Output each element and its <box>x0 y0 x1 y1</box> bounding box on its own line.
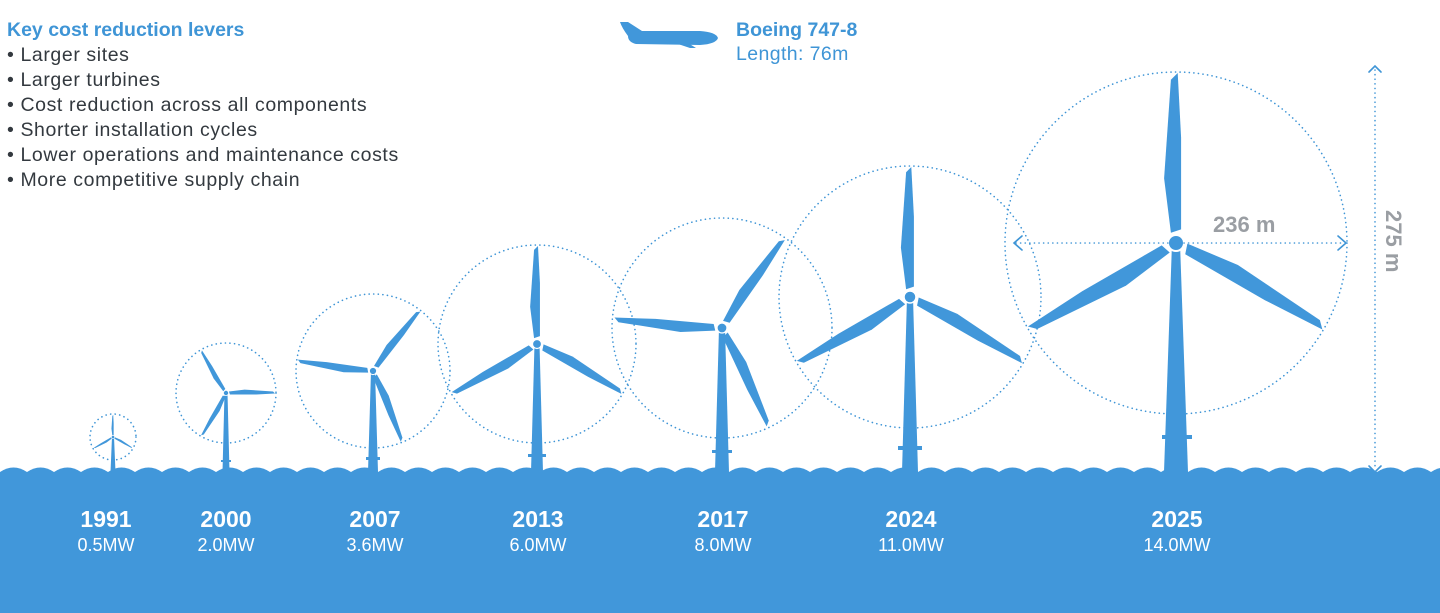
text block: key cost reduction levers: • Larger sites <box>7 44 130 66</box>
year labels: 2024 <box>885 506 937 532</box>
label: 236 m: 236 m <box>1213 212 1275 237</box>
plane caption <box>736 19 858 65</box>
year labels: 11.0MW <box>878 535 944 555</box>
dimension: height 275 m <box>1369 66 1381 472</box>
text block: key cost reduction levers: • Lower operations and maintenance costs <box>7 144 399 166</box>
year labels: 2013 <box>512 506 564 532</box>
rotor circles <box>90 72 1347 460</box>
year labels: 2017 <box>697 506 749 532</box>
text block: key cost reduction levers: • More competitive supply chain <box>7 169 300 191</box>
icon: boeing plane <box>620 22 718 48</box>
year labels: 14.0MW <box>1143 535 1211 555</box>
text block: key cost reduction levers <box>7 19 399 191</box>
turbine 2025 <box>1026 73 1329 472</box>
text block: key cost reduction levers: Key cost reduction levers <box>7 19 244 41</box>
turbine 2024 <box>795 167 1027 472</box>
turbine 2013 <box>451 246 625 472</box>
year labels: 2025 <box>1151 506 1203 532</box>
year labels: 8.0MW <box>694 535 752 555</box>
year labels: 2007 <box>349 506 401 532</box>
year labels: 2000 <box>200 506 252 532</box>
plane caption: Length: 76m <box>736 43 849 65</box>
label: 275 m: 275 m <box>1381 210 1406 272</box>
turbine 2000 <box>164 328 278 472</box>
plane caption: Boeing 747-8 <box>736 19 858 41</box>
text block: key cost reduction levers: • Shorter installation cycles <box>7 119 258 141</box>
year labels: 1991 <box>80 506 132 532</box>
turbine 2017 <box>609 185 864 472</box>
turbine 2007 <box>294 270 474 472</box>
dimension: rotor diameter 236 m <box>1014 236 1346 250</box>
year labels: 0.5MW <box>77 535 135 555</box>
year labels: 2.0MW <box>197 535 255 555</box>
text block: key cost reduction levers: • Larger turbines <box>7 69 161 91</box>
year labels: 3.6MW <box>346 535 404 555</box>
year labels: 6.0MW <box>509 535 567 555</box>
year labels <box>77 506 1211 555</box>
water <box>0 466 1440 613</box>
text block: key cost reduction levers: • Cost reduction across all components <box>7 94 367 116</box>
turbine 1991 <box>94 415 133 472</box>
